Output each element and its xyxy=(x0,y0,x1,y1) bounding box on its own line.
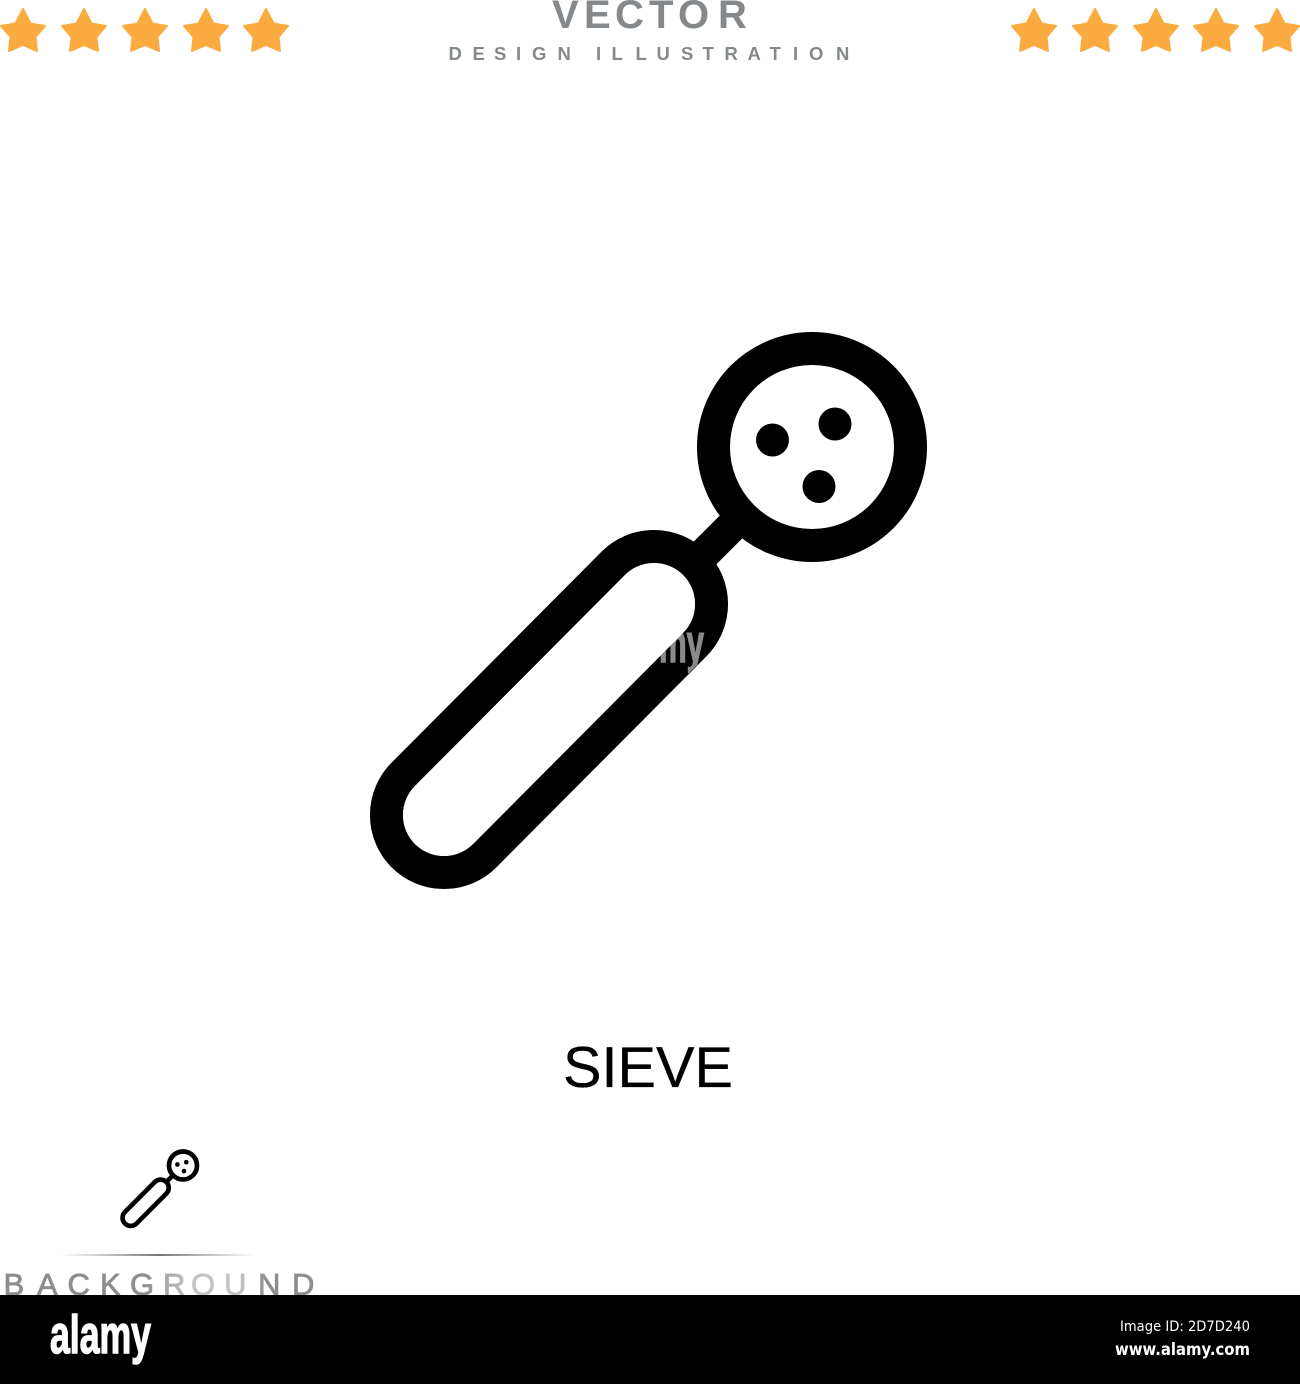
logo: alamy: alamy xyxy=(50,1305,151,1365)
label: background: BACKGROUND xyxy=(4,1267,314,1302)
title: sieve: SIEVE xyxy=(563,1036,733,1100)
sieve holes xyxy=(756,408,852,503)
right star rating xyxy=(1012,9,1299,51)
icon: large sieve xyxy=(386,348,910,873)
sieve head xyxy=(714,348,910,546)
icon: small sieve xyxy=(123,1151,197,1226)
sieve connector xyxy=(704,513,745,554)
watermark fragment: my xyxy=(659,614,704,674)
image id: Image ID: 2D7D240 xyxy=(1120,1319,1250,1335)
left star rating xyxy=(1,9,288,51)
sieve handle xyxy=(386,546,712,873)
subheading: design illustration: DESIGN ILLUSTRATION xyxy=(0,43,849,64)
footer bar xyxy=(0,1295,1300,1384)
website: www.alamy.com xyxy=(1115,1340,1250,1359)
handle interior xyxy=(403,563,695,856)
